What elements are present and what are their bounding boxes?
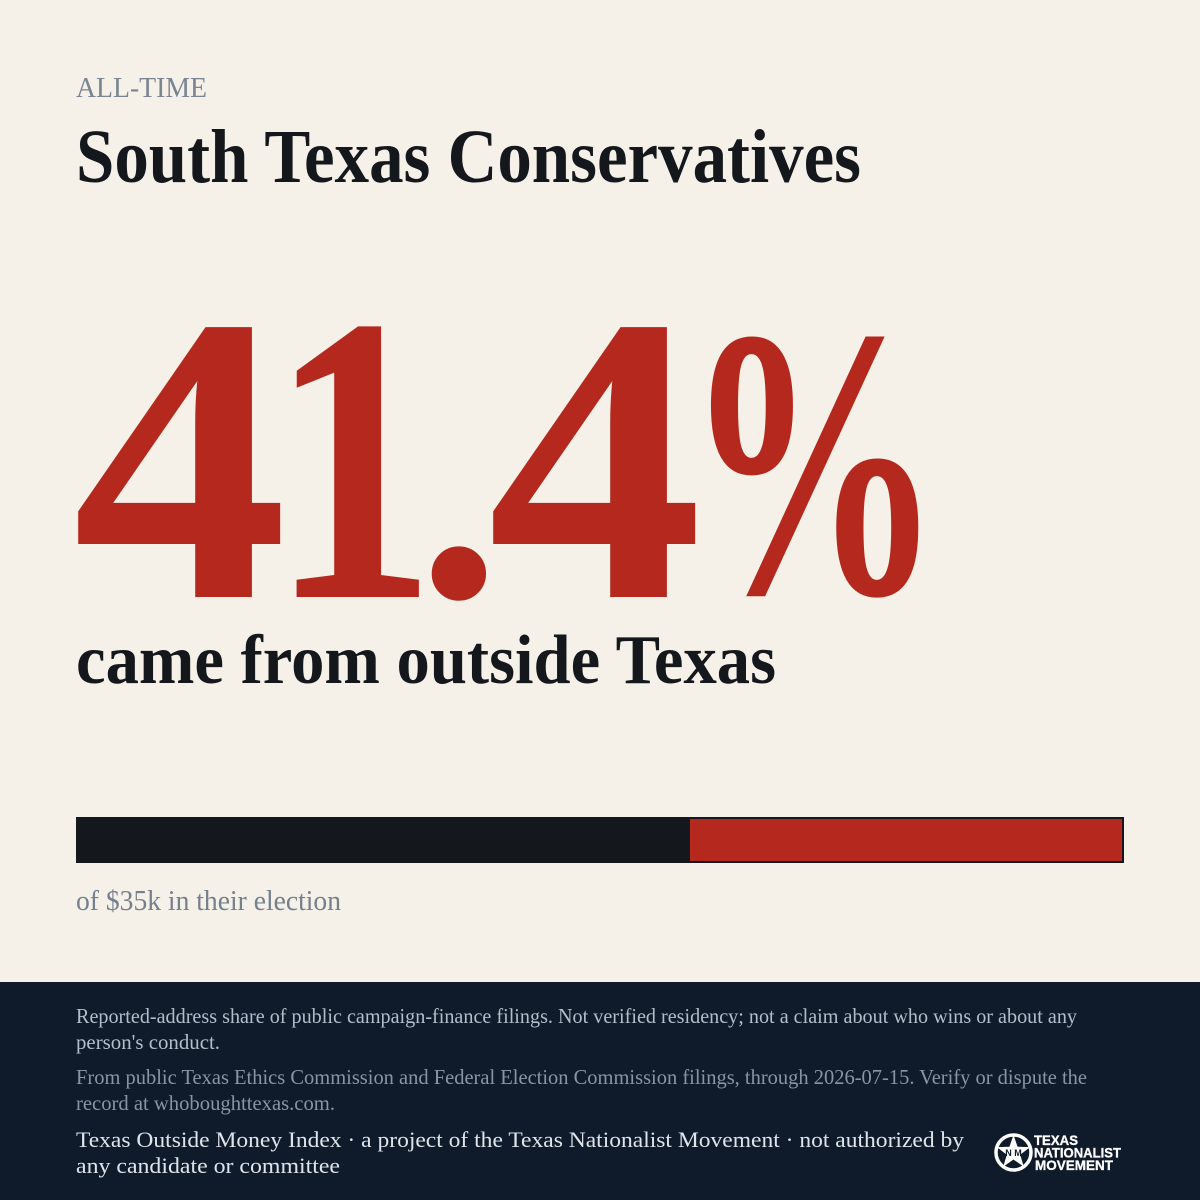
logo wordmark: TEXAS	[1034, 1132, 1078, 1148]
disclaimer text: Reported-address share of public campaign-finance filings. Not verified residency; not a claim about who wins or about any	[76, 1004, 1077, 1028]
hero statistic: 4	[72, 233, 288, 687]
hero statistic: 4	[487, 233, 703, 687]
logo wordmark	[1034, 1132, 1121, 1173]
source text: record at whoboughttexas.com.	[76, 1091, 335, 1115]
hero statistic: %	[684, 249, 942, 676]
footer panel	[0, 982, 1200, 1200]
subheading: came from outside Texas	[76, 622, 776, 699]
source text	[76, 1065, 1087, 1115]
eyebrow label: ALL-TIME	[76, 72, 207, 104]
icon: star seal: N M	[1005, 1148, 1022, 1158]
bar caption: of $35k in their election	[76, 885, 341, 917]
logo wordmark: NATIONALIST	[1034, 1144, 1121, 1160]
source text: From public Texas Ethics Commission and Federal Election Commission filings, through 2026-07-15. Verify or dispute the	[76, 1065, 1087, 1089]
hero statistic: .	[417, 298, 501, 669]
logo wordmark: MOVEMENT	[1035, 1157, 1113, 1173]
hero statistic: 1	[270, 232, 436, 686]
hero statistic	[72, 232, 942, 687]
title: South Texas Conservatives	[76, 115, 861, 199]
disclaimer text	[76, 1004, 1077, 1054]
attribution text: Texas Outside Money Index · a project of the Texas Nationalist Movement · not authorized by	[76, 1127, 964, 1152]
logo: Texas Nationalist Movement	[996, 1132, 1121, 1173]
attribution text: any candidate or committee	[76, 1153, 340, 1178]
disclaimer text: person's conduct.	[76, 1030, 220, 1054]
progress bar	[76, 817, 1124, 863]
attribution text	[76, 1127, 964, 1178]
